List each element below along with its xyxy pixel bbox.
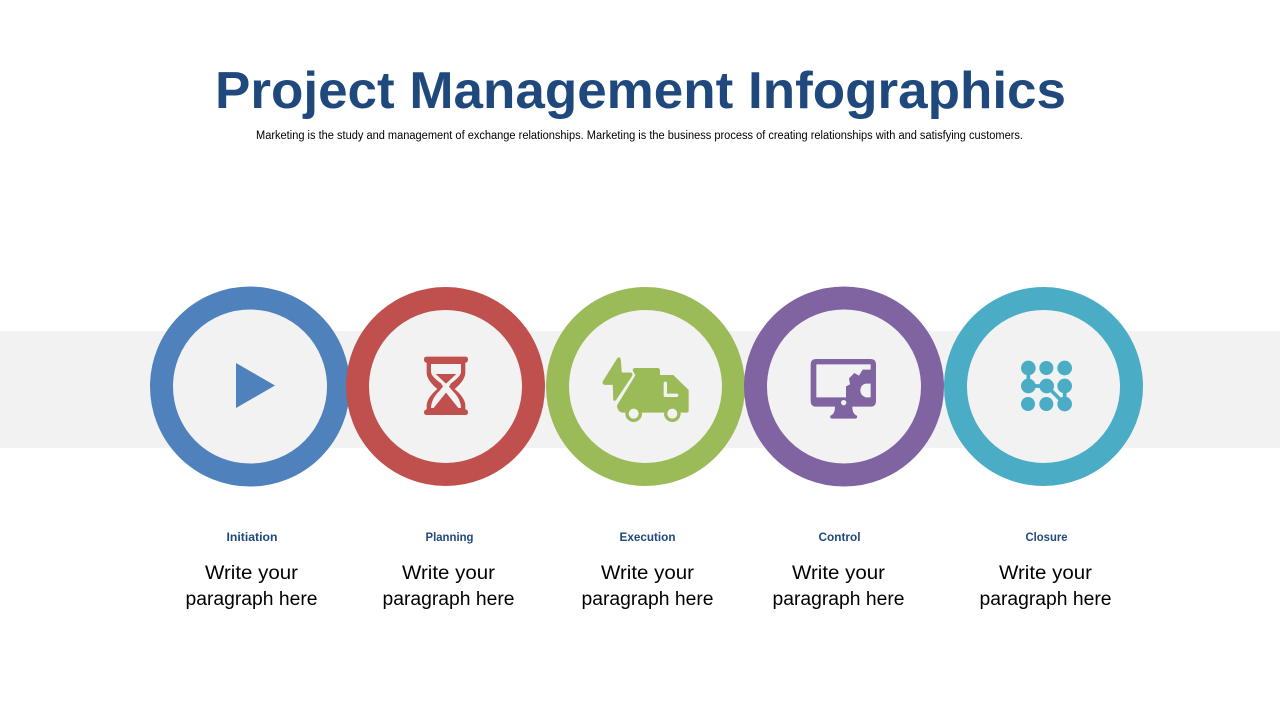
ring: execution: [558, 298, 734, 474]
ring: initiation: [162, 298, 338, 475]
step 2: planning: [358, 298, 534, 610]
step 4: control: [756, 298, 932, 610]
paragraph: initiation: Write your: [205, 563, 299, 584]
ring: closure: [956, 298, 1132, 474]
icon: monitor with gear: [811, 359, 876, 419]
title: Project Management Infographics: [215, 62, 1066, 120]
icon: play: [236, 363, 275, 408]
label: closure: Closure: [1026, 530, 1068, 544]
paragraph: initiation: paragraph here: [186, 589, 318, 610]
label: control: Control: [818, 530, 860, 544]
paragraph: control: Write your: [792, 563, 886, 584]
paragraph: execution: paragraph here: [582, 589, 714, 610]
paragraph: closure: Write your: [999, 563, 1093, 584]
label: planning: Planning: [426, 530, 474, 544]
paragraph: planning: Write your: [402, 563, 496, 584]
paragraph: planning: paragraph here: [382, 589, 514, 610]
icon: hourglass: [424, 357, 468, 415]
paragraph: closure: paragraph here: [980, 589, 1112, 610]
label: execution: Execution: [620, 530, 676, 544]
step 3: execution: [558, 298, 734, 610]
ring: control: [756, 298, 932, 475]
paragraph: execution: Write your: [601, 563, 695, 584]
subtitle: Marketing is the study and management of exchange relationships. Marketing is the business process of creating relationships with and satisfying customers.: [256, 130, 1023, 142]
step 1: initiation: [162, 298, 338, 610]
step 5: closure: [956, 298, 1132, 610]
icon: electric truck: [603, 358, 689, 422]
ring: planning: [358, 298, 534, 474]
label: initiation: Initiation: [226, 530, 278, 544]
paragraph: control: paragraph here: [772, 589, 904, 610]
icon: connected dots: [1021, 361, 1072, 411]
